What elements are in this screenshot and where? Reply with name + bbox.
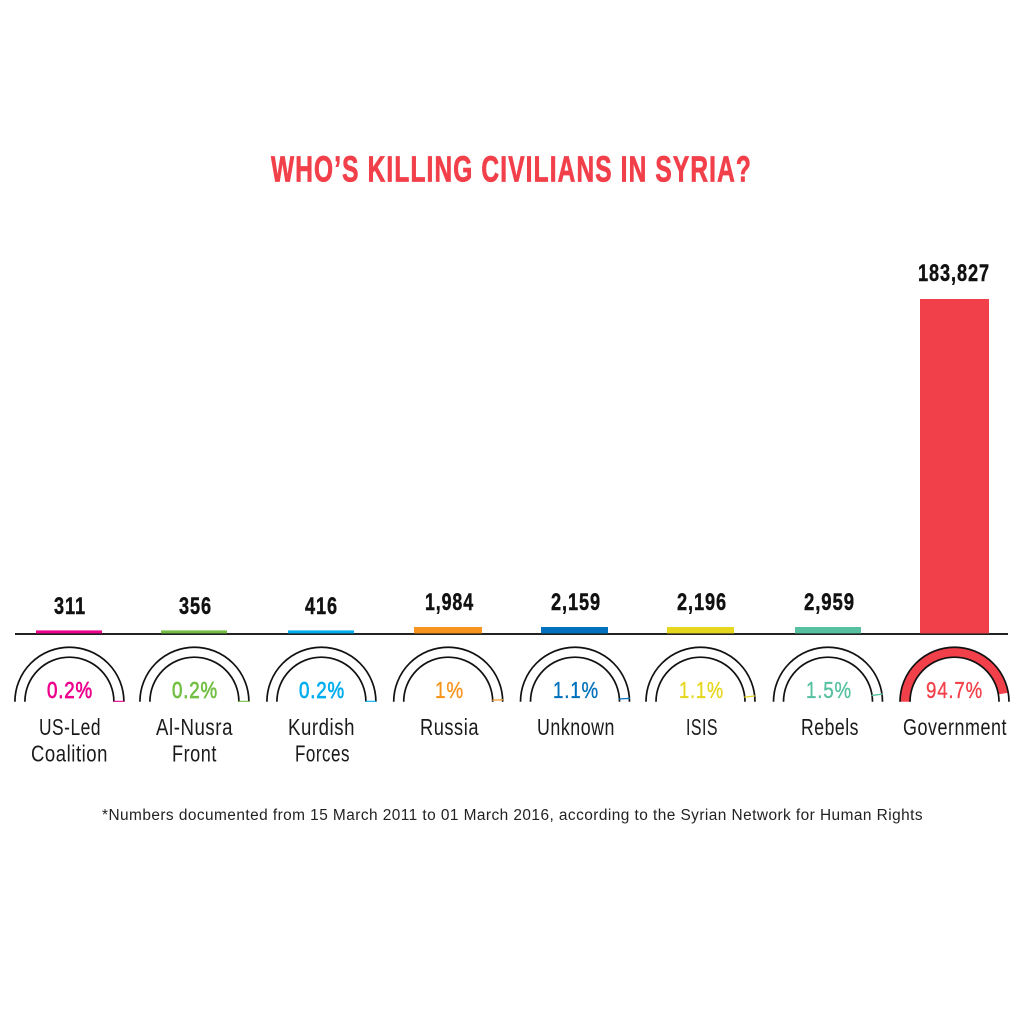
column: Government <box>900 260 1009 740</box>
label: Al-Nusra Front: Al-Nusra <box>156 714 233 740</box>
label: Kurdish Forces: Kurdish <box>288 714 355 740</box>
bar: Unknown <box>541 627 608 633</box>
value: 2,196: 2,196 <box>677 589 727 616</box>
bar: Al-Nusra Front <box>161 630 227 633</box>
column: Russia <box>394 589 503 740</box>
value: 1,984: 1,984 <box>425 589 474 616</box>
footnote: *Numbers documented from 15 March 2011 to 01 March 2016, according to the Syrian Network for Human Rights <box>102 807 923 824</box>
bar: Kurdish Forces <box>288 630 354 633</box>
label line 2: Front <box>172 740 217 766</box>
gauge: 0.2% <box>140 647 249 702</box>
column: Kurdish Forces <box>267 593 376 766</box>
label: Russia: Russia <box>420 714 479 740</box>
percentage: 0.2%: 0.2% <box>299 677 345 703</box>
gauge: 1.1% <box>520 647 630 702</box>
axis baseline <box>15 633 1008 635</box>
value: 2,959: 2,959 <box>804 589 855 616</box>
gauge: 94.7% <box>900 647 1009 702</box>
value: 311: 311 <box>54 593 86 620</box>
label line 2: Forces <box>295 740 350 766</box>
gauge: 1% <box>394 647 503 702</box>
label: US-Led Coalition: US-Led <box>39 714 101 740</box>
column: Unknown <box>520 589 630 740</box>
value: 356: 356 <box>179 593 212 620</box>
bar: US-Led Coalition <box>36 630 102 633</box>
column: Al-Nusra Front <box>140 593 249 766</box>
label: Unknown: Unknown <box>537 714 615 740</box>
column: Rebels <box>774 589 882 740</box>
label: Rebels: Rebels <box>801 714 859 740</box>
percentage: 1.1%: 1.1% <box>553 677 599 703</box>
percentage: 1.5%: 1.5% <box>806 677 852 703</box>
title: WHO’S KILLING CIVILIANS IN SYRIA? <box>271 148 752 190</box>
column: ISIS <box>646 589 755 740</box>
value: 183,827: 183,827 <box>918 260 990 287</box>
percentage: 94.7%: 94.7% <box>926 677 983 703</box>
value: 2,159: 2,159 <box>551 589 601 616</box>
column: US-Led Coalition <box>15 593 124 766</box>
label line 2: Coalition <box>31 740 108 766</box>
percentage: 0.2%: 0.2% <box>47 677 93 703</box>
value: 416: 416 <box>305 593 338 620</box>
percentage: 1.1%: 1.1% <box>679 677 724 703</box>
gauge: 1.5% <box>774 647 882 702</box>
gauge: 0.2% <box>15 647 124 702</box>
bar: ISIS <box>667 627 734 633</box>
label: ISIS: ISIS <box>686 714 718 740</box>
gauge: 1.1% <box>646 647 755 702</box>
bar: Russia <box>414 627 482 633</box>
gauge: 0.2% <box>267 647 376 702</box>
bar: Rebels <box>795 627 861 633</box>
bar: Government <box>920 299 989 633</box>
percentage: 0.2%: 0.2% <box>172 677 218 703</box>
percentage: 1%: 1% <box>435 677 464 703</box>
